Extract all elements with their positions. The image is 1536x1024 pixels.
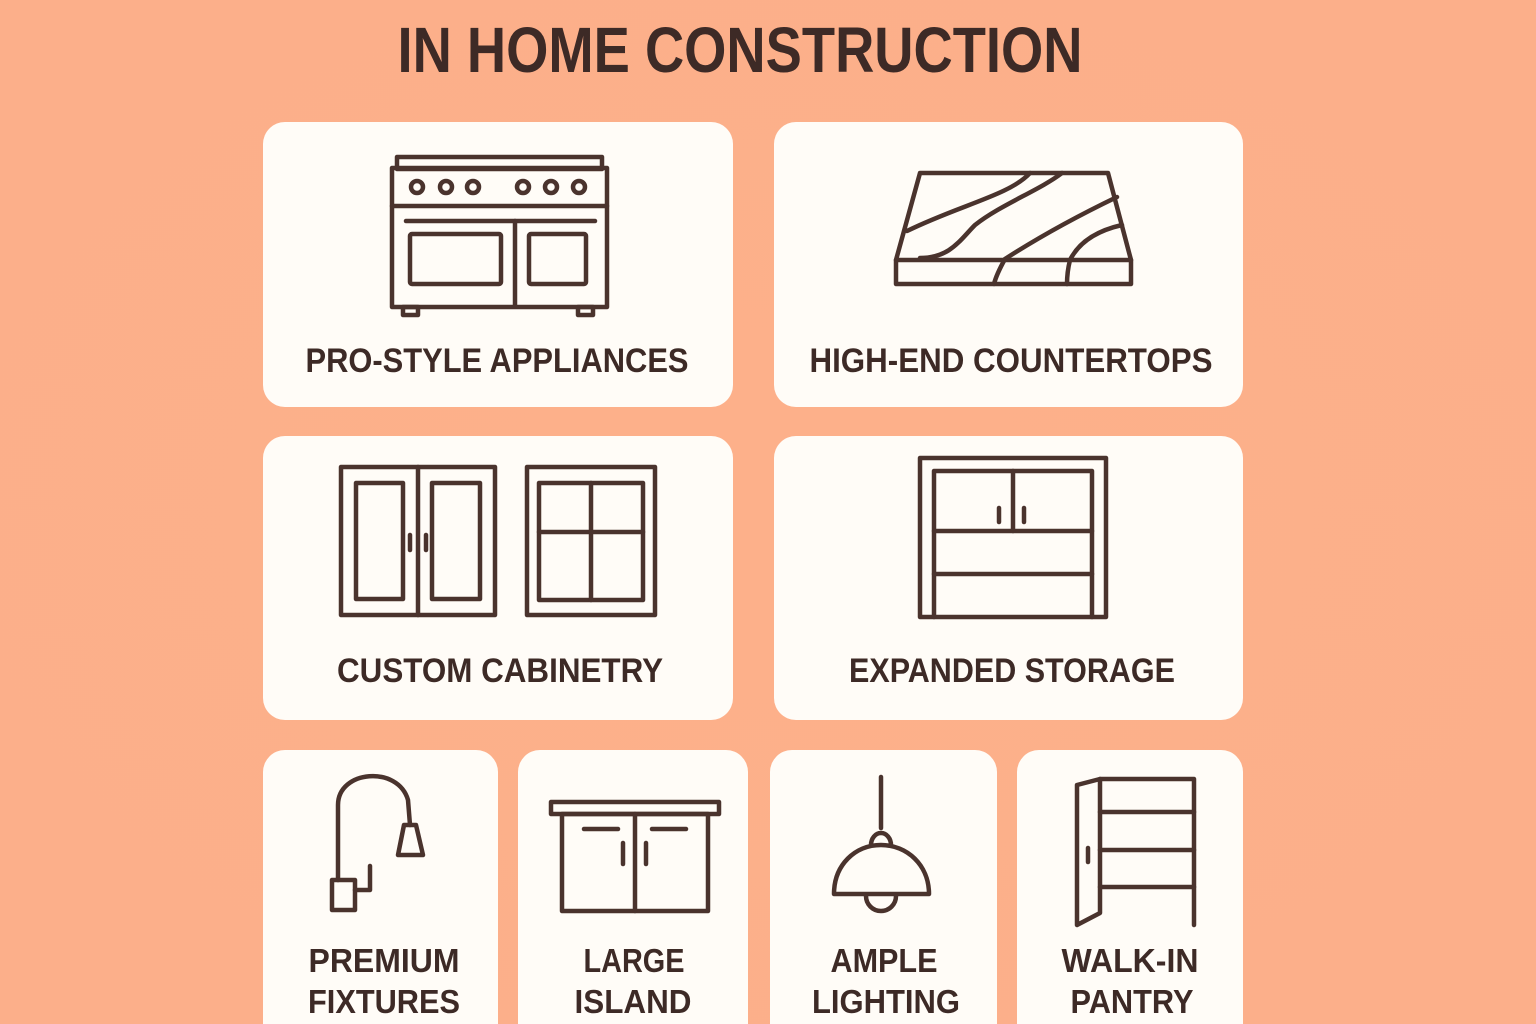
label: CUSTOM CABINETRY bbox=[337, 652, 663, 690]
icon: pantry bbox=[1077, 779, 1194, 925]
icon: range bbox=[392, 157, 607, 315]
panel: high-end countertops bbox=[774, 122, 1243, 407]
icon: cabinets bbox=[341, 467, 655, 615]
label: LARGE bbox=[584, 942, 684, 979]
label: PREMIUM bbox=[308, 942, 460, 979]
icon: island bbox=[551, 802, 719, 911]
label: HIGH-END COUNTERTOPS bbox=[810, 342, 1212, 380]
icon: pendant lamp bbox=[834, 777, 929, 911]
icon: countertop slab bbox=[896, 173, 1131, 284]
panel: custom cabinetry bbox=[263, 436, 733, 720]
panel: large island bbox=[518, 750, 748, 1024]
title: IN HOME CONSTRUCTION bbox=[398, 14, 1082, 86]
panel: premium fixtures bbox=[263, 750, 498, 1024]
panel: ample lighting: LIGHTING bbox=[812, 983, 960, 1020]
label: WALK-IN bbox=[1062, 942, 1198, 979]
label: AMPLE bbox=[830, 942, 938, 979]
panel: walk-in pantry: PANTRY bbox=[1070, 983, 1194, 1020]
panel: expanded storage bbox=[774, 436, 1243, 720]
panel: large island: ISLAND bbox=[574, 983, 692, 1020]
icon: storage unit bbox=[920, 458, 1106, 617]
icon: faucet bbox=[332, 776, 423, 910]
label: EXPANDED STORAGE bbox=[849, 652, 1175, 690]
panel: ample lighting bbox=[770, 750, 997, 1024]
panel: walk-in pantry bbox=[1017, 750, 1243, 1024]
panel: premium fixtures: FIXTURES bbox=[308, 983, 460, 1020]
label: PRO-STYLE APPLIANCES bbox=[306, 342, 688, 380]
panel: pro-style appliances bbox=[263, 122, 733, 407]
